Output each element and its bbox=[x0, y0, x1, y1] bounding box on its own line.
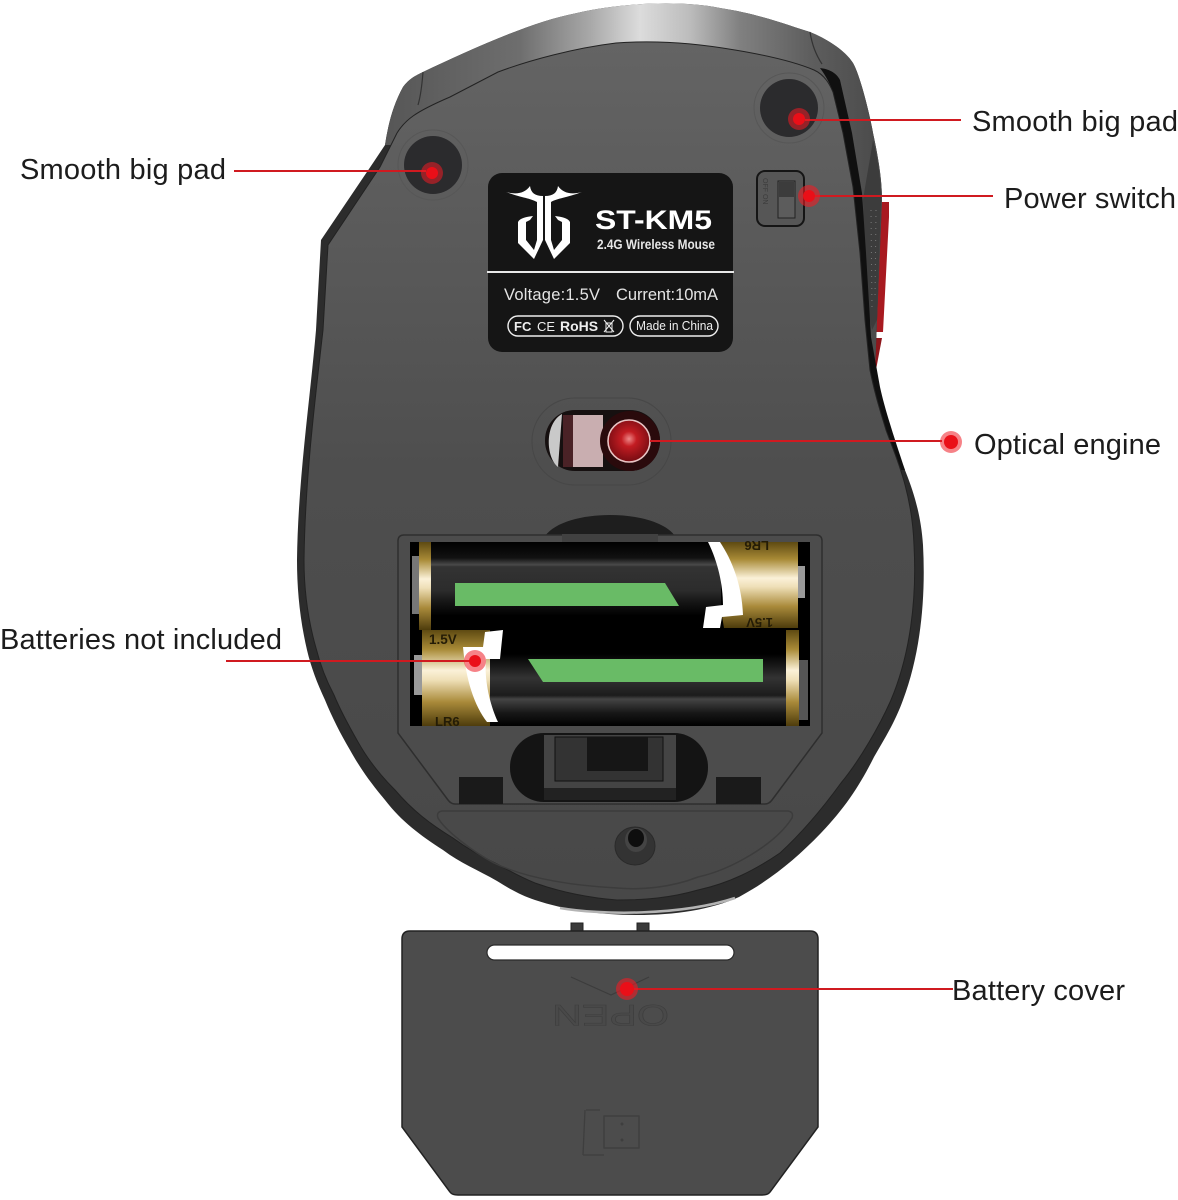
certification badge bbox=[508, 316, 623, 336]
clip left bbox=[459, 777, 503, 804]
voltage: Voltage:1.5V bbox=[504, 286, 600, 304]
bottom battery bbox=[414, 630, 808, 729]
certification badge: RoHS bbox=[560, 318, 598, 334]
certification badge: FC bbox=[514, 319, 532, 334]
side grip bbox=[863, 140, 881, 330]
label sticker bbox=[487, 173, 734, 352]
rubber pad left bbox=[398, 130, 468, 200]
cover plate bbox=[402, 931, 818, 1195]
latch slot bbox=[510, 733, 708, 802]
battery cover bbox=[402, 923, 818, 1195]
callout: power switch bbox=[798, 183, 1176, 215]
callout: battery cover: Battery cover bbox=[952, 975, 1125, 1007]
power switch bbox=[757, 171, 804, 226]
battery text top: LR6 bbox=[744, 538, 769, 553]
origin badge: Made in China bbox=[636, 319, 713, 333]
callout: batteries not included bbox=[0, 624, 486, 672]
callout: smooth big pad right bbox=[788, 106, 1178, 138]
open text: OPEN bbox=[552, 998, 669, 1031]
bottom battery: LR6 bbox=[435, 714, 460, 729]
battery well bbox=[410, 542, 810, 726]
callout: optical engine: Optical engine bbox=[974, 429, 1161, 461]
red side buttons bbox=[871, 202, 889, 375]
green stripe bbox=[528, 659, 763, 682]
lower seam bbox=[438, 811, 792, 889]
certification badge: CE bbox=[537, 319, 555, 334]
callout: smooth big pad left bbox=[20, 154, 443, 186]
callout: optical engine bbox=[650, 429, 1161, 461]
cover tabs bbox=[571, 923, 649, 932]
callout: batteries not included: Batteries not included bbox=[0, 624, 282, 656]
callout: smooth big pad right: Smooth big pad bbox=[972, 106, 1178, 138]
open arrow bbox=[571, 977, 649, 995]
callout: battery cover bbox=[616, 975, 1125, 1007]
product type: 2.4G Wireless Mouse bbox=[597, 237, 715, 252]
origin badge bbox=[630, 316, 718, 336]
cover slot bbox=[487, 945, 734, 960]
black edge band bbox=[820, 68, 905, 470]
base plate bbox=[304, 42, 915, 900]
mouse underside bbox=[297, 3, 924, 915]
callout: power switch: Power switch bbox=[1004, 183, 1176, 215]
top battery: 1.5V bbox=[746, 615, 773, 630]
rubber pad right bbox=[754, 73, 824, 143]
model name: ST-KM5 bbox=[595, 205, 712, 235]
power switch: OFF ON bbox=[761, 178, 768, 204]
optical engine bbox=[532, 398, 671, 485]
green stripe bbox=[455, 583, 679, 606]
callout: smooth big pad left: Smooth big pad bbox=[20, 154, 226, 186]
clip right bbox=[716, 777, 761, 804]
lock icon bbox=[583, 1110, 639, 1155]
battery text bottom: 1.5V bbox=[429, 632, 457, 647]
top battery bbox=[412, 538, 805, 630]
icon: brand emblem bbox=[506, 186, 582, 259]
wheel recess bbox=[545, 515, 675, 536]
current: Current:10mA bbox=[616, 286, 718, 304]
screw bbox=[615, 827, 655, 865]
mouse outer shell bbox=[297, 3, 924, 915]
battery compartment frame bbox=[398, 535, 822, 804]
